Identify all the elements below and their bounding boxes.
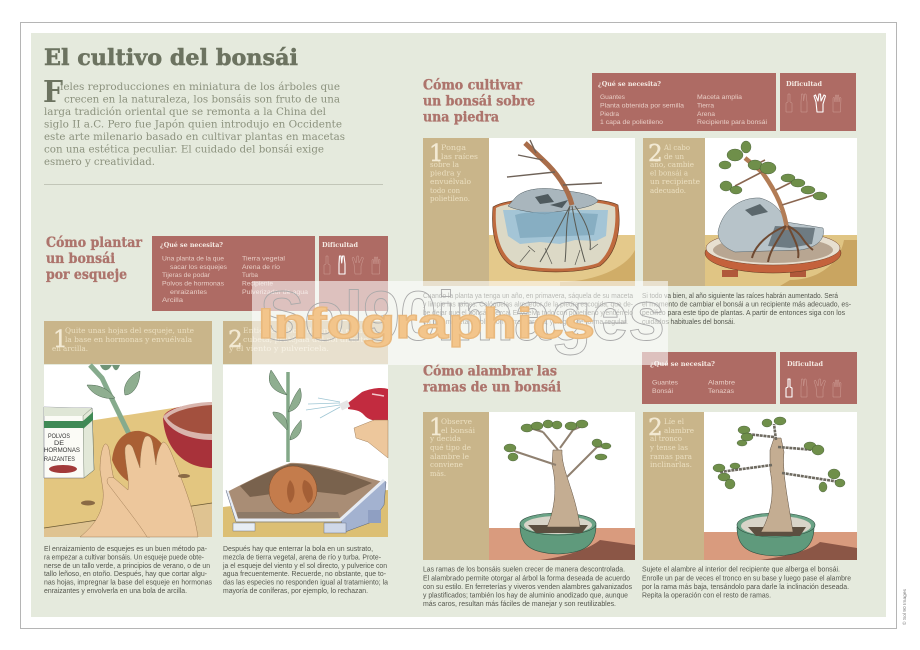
intro text: con una estética peculiar. El cuidado del bonsái exige — [44, 144, 324, 156]
step text: todo con — [430, 186, 460, 195]
step text: las raíces — [441, 152, 478, 161]
step text: el bonsái — [441, 426, 476, 435]
intro text: esmero y creatividad. — [44, 156, 155, 168]
illustration: manos modelando la bola de arcilla — [44, 365, 212, 537]
panel: materiales esqueje: Pulverizador de agua — [242, 289, 308, 296]
step text: Observe — [441, 417, 472, 426]
step text: ramas para — [650, 452, 693, 461]
step text: piedra y — [430, 168, 462, 178]
body text — [222, 546, 388, 595]
step text — [643, 138, 705, 286]
panel: alambrar paso 2 — [642, 412, 857, 600]
step text: el bonsái a — [650, 168, 689, 178]
panel: esqueje paso 1 — [44, 321, 213, 595]
step text: Al cabo — [663, 143, 691, 152]
step text: conviene — [430, 460, 463, 469]
panel: dificultad esqueje — [319, 236, 388, 311]
body text: el momento de cambiar el bonsái a un recipiente más adecuado, es- — [642, 302, 851, 308]
panel: materiales piedra: Arena — [697, 111, 715, 118]
body text: tallo leñoso, en otoño. Después, hay que cortar algu- — [44, 571, 207, 578]
box label: POLVOS — [48, 433, 71, 440]
step text: cubeta, protéjala del sol directo — [243, 335, 369, 344]
body text: das las especies no responden igual al tratamiento; la — [223, 580, 388, 586]
panel: materiales piedra: Maceta amplia — [697, 94, 742, 101]
panel: dificultad piedra: Dificultad — [786, 81, 823, 88]
panel: materiales esqueje: Tijeras de podar — [162, 272, 211, 279]
body text: be dejar que el bonsái crezca. Envuelva todo con polietileno y entiérrelo — [423, 310, 633, 317]
panel: materiales piedra: Tierra — [697, 102, 714, 110]
body text: Repita la operación con el resto de ramas. — [642, 592, 771, 600]
panel: materiales esqueje: Recipiente — [242, 280, 273, 288]
section heading: sobre una piedra: una piedra — [423, 110, 499, 126]
box label: HORMONAS — [44, 447, 81, 454]
step text: un recipiente — [650, 177, 700, 186]
panel: piedra paso 1 — [423, 138, 635, 326]
body text: enraizantes y envolverla en una bola de arcilla. — [44, 588, 187, 595]
section heading: plantar por esqueje — [46, 235, 143, 283]
body text — [423, 293, 633, 326]
body text: en una maceta amplia con tierra y arena, y riegue de forma regular. — [423, 319, 628, 326]
panel: materiales alambrar: Guantes — [652, 380, 679, 386]
step text: en arcilla. — [52, 344, 88, 353]
step text: 1 — [429, 141, 444, 167]
body text: y plastificados; también los hay de aluminio anodizado que, aunque — [423, 592, 628, 600]
step text — [44, 321, 212, 364]
body text: por la rama más baja, tensándolo para darle la inclinación deseada. — [642, 584, 849, 591]
step text: qué tipo de — [430, 443, 471, 452]
panel: dificultad esqueje: Dificultad — [322, 242, 359, 249]
body text: Si todo va bien, al año siguiente las raíces habrán aumentado. Será — [642, 293, 838, 300]
panel: materiales alambrar: Tenazas — [708, 388, 735, 395]
title: El cultivo del bonsái — [44, 45, 298, 71]
body text: nas hojas, impregnar la base del esqueje en hormonas — [44, 580, 213, 586]
panel: materiales esqueje: Arcilla — [162, 297, 183, 304]
watermark: Sol90images — [260, 277, 665, 355]
panel: materiales piedra: Guantes — [600, 94, 626, 101]
body text: pecífico para este tipo de plantas. A partir de entonces siga con los — [642, 310, 846, 317]
panel: materiales esqueje: sacar los esquejes — [170, 264, 228, 271]
step text: más. — [430, 469, 446, 478]
body text: mayoría de coníferas, por ejemplo, lo rechazan. — [223, 588, 368, 595]
step text: adecuado. — [650, 186, 686, 195]
intro text: larga tradición oriental que se remonta a la China del — [44, 106, 327, 118]
body text: ja el esqueje del viento y el sol directo, y pulverice con — [222, 563, 387, 570]
intro text: siglo II a.C. Pero fue Japón quien introdujo en Occidente — [44, 118, 342, 130]
panel: materiales alambrar — [642, 352, 776, 404]
step text: Líe el — [664, 417, 685, 426]
illustration: bonsái alambrado — [704, 412, 857, 560]
panel: materiales piedra — [592, 73, 776, 131]
step text: inclinarlas. — [650, 460, 692, 469]
step text: 1 — [429, 415, 444, 441]
step text: al tronco — [650, 434, 683, 443]
step text: de un — [664, 152, 684, 161]
step text: envuélvalo — [430, 177, 472, 186]
panel: dificultad alambrar: Dificultad — [787, 361, 824, 368]
body text — [642, 293, 851, 326]
panel: dificultad alambrar — [780, 352, 857, 404]
body text: y limpie las raíces. Colóquelas alrededor de la piedra escogida, que de- — [423, 302, 633, 308]
intro text — [43, 75, 345, 168]
panel: materiales alambrar: Bonsái — [652, 388, 673, 395]
step text: y decida — [429, 434, 462, 443]
intro text: crecen en la naturaleza, los bonsáis son fruto de una — [64, 94, 340, 106]
panel: dificultad piedra — [780, 73, 856, 131]
panel: materiales piedra: ¿Qué se necesita? — [598, 81, 662, 88]
section heading: alambrar: Cómo alambrar las — [423, 364, 557, 380]
step text: 2 — [648, 415, 663, 441]
panel: materiales piedra: Piedra — [600, 111, 619, 118]
illustration: esqueje en maceta con pulverizador — [223, 365, 388, 537]
panel: alambrar paso 1 — [423, 412, 635, 608]
body text: Las ramas de los bonsáis suelen crecer de manera descontrolada. — [423, 566, 625, 574]
body text: cuidados habituales del bonsái. — [642, 319, 735, 326]
intro text: este arte milenario basado en cultivar plantas en macetas — [44, 131, 345, 143]
intro text: ieles reproducciones en miniatura de los árboles que — [60, 81, 340, 93]
step text: alambre — [664, 426, 694, 435]
copyright: © Sol 90 Images — [901, 588, 907, 625]
body text: Después hay que enterrar la bola en un sustrato, — [223, 546, 373, 553]
body text: mezcla de tierra vegetal, arena de río y turba. Prote- — [223, 554, 381, 562]
step text: sobre la — [430, 160, 460, 169]
body text: El enraizamiento de esquejes es un buen método pa- — [44, 546, 207, 553]
body text: más caros, resultan más fáciles de manejar y son reutilizables. — [423, 601, 616, 608]
step text: 2 — [228, 327, 243, 353]
body text: agua frecuentemente. Recuerde, no obstante, que to- — [223, 571, 386, 578]
body text: Sujete el alambre al interior del recipiente que alberga el bonsái. — [642, 566, 840, 574]
panel: materiales piedra: Planta obtenida por semilla — [600, 102, 684, 110]
panel: materiales esqueje: Tierra vegetal — [242, 256, 285, 262]
panel: materiales esqueje: ¿Qué se necesita? — [160, 242, 224, 249]
step text — [643, 412, 704, 560]
section heading: plantar por esqueje: un bonsái — [46, 251, 115, 267]
body text: El alambrado permite otorgar al árbol la forma deseada de acuerdo — [423, 576, 630, 582]
panel: materiales esqueje: enraizantes — [170, 289, 208, 296]
body text: nerse de un tallo verde, a principios de verano, o de un — [44, 563, 210, 570]
panel: materiales esqueje: Polvos de hormonas — [162, 280, 225, 288]
body text: con su estilo. En ferreterías y viveros venden alambres galvanizados — [423, 584, 633, 591]
step text: polietileno. — [430, 194, 470, 203]
illustration: bonsái sobre piedra en bandeja — [705, 138, 857, 286]
step text: Quite unas hojas del esqueje, unte — [65, 326, 194, 335]
drop cap: F — [43, 75, 63, 110]
panel: materiales piedra: Recipiente para bonsái — [697, 119, 767, 126]
step text: la base en hormonas y envuélvala — [65, 335, 193, 344]
body text — [44, 546, 213, 595]
section heading: sobre una piedra: un bonsái sobre — [423, 94, 535, 110]
panel: materiales alambrar: ¿Qué se necesita? — [650, 361, 716, 368]
step text: año, cambie — [650, 160, 694, 169]
panel: materiales esqueje: Turba — [242, 272, 258, 279]
step text: y tense las — [649, 443, 688, 452]
step text: Ponga — [441, 143, 467, 152]
box label — [44, 433, 81, 463]
step text: alambre le — [430, 452, 469, 461]
panel: materiales esqueje — [152, 236, 315, 311]
step text — [423, 412, 489, 560]
right hand — [107, 436, 198, 537]
step text — [223, 321, 388, 364]
body text: Enrolle un par de veces el tronco en su base y luego pase el alambre — [642, 576, 851, 582]
section heading: plantar por esqueje: Cómo plantar — [46, 235, 143, 251]
box label: DE — [54, 440, 65, 447]
left hand — [80, 444, 150, 537]
body text — [423, 566, 633, 608]
panel: esqueje paso 2 — [222, 321, 388, 595]
illustration: piedra y raíces en maceta — [489, 138, 635, 286]
box label: RAIZANTES — [44, 456, 76, 463]
body text — [642, 566, 851, 600]
section heading: sobre una piedra — [423, 78, 535, 126]
step text — [423, 138, 489, 286]
panel: piedra paso 2 — [642, 138, 857, 326]
step text: y el viento y pulverícela. — [228, 344, 329, 353]
step text: 1 — [53, 327, 68, 353]
panel: materiales alambrar: Alambre — [708, 380, 735, 386]
step text: Entierre la bola de arcilla en una — [243, 326, 373, 335]
panel: materiales esqueje: Una planta de la que — [162, 256, 224, 262]
section heading: plantar por esqueje: por esqueje — [46, 267, 127, 283]
section heading: sobre una piedra: Cómo cultivar — [423, 78, 523, 94]
step text: 2 — [648, 141, 663, 167]
watermark: Infographics — [258, 300, 595, 348]
body text: Cuando la planta ya tenga un año, en primavera, sáquela de su maceta — [423, 293, 633, 300]
section heading: alambrar: ramas de un bonsái — [423, 380, 561, 396]
section heading: alambrar — [423, 364, 561, 396]
panel: materiales esqueje: Arena de río — [242, 264, 280, 271]
body text: ra empezar a cultivar bonsáis. Un esqueje puede obte- — [44, 554, 204, 562]
illustration: bonsái sin alambrar — [489, 412, 635, 560]
panel: materiales piedra: 1 capa de polietileno — [600, 119, 663, 126]
